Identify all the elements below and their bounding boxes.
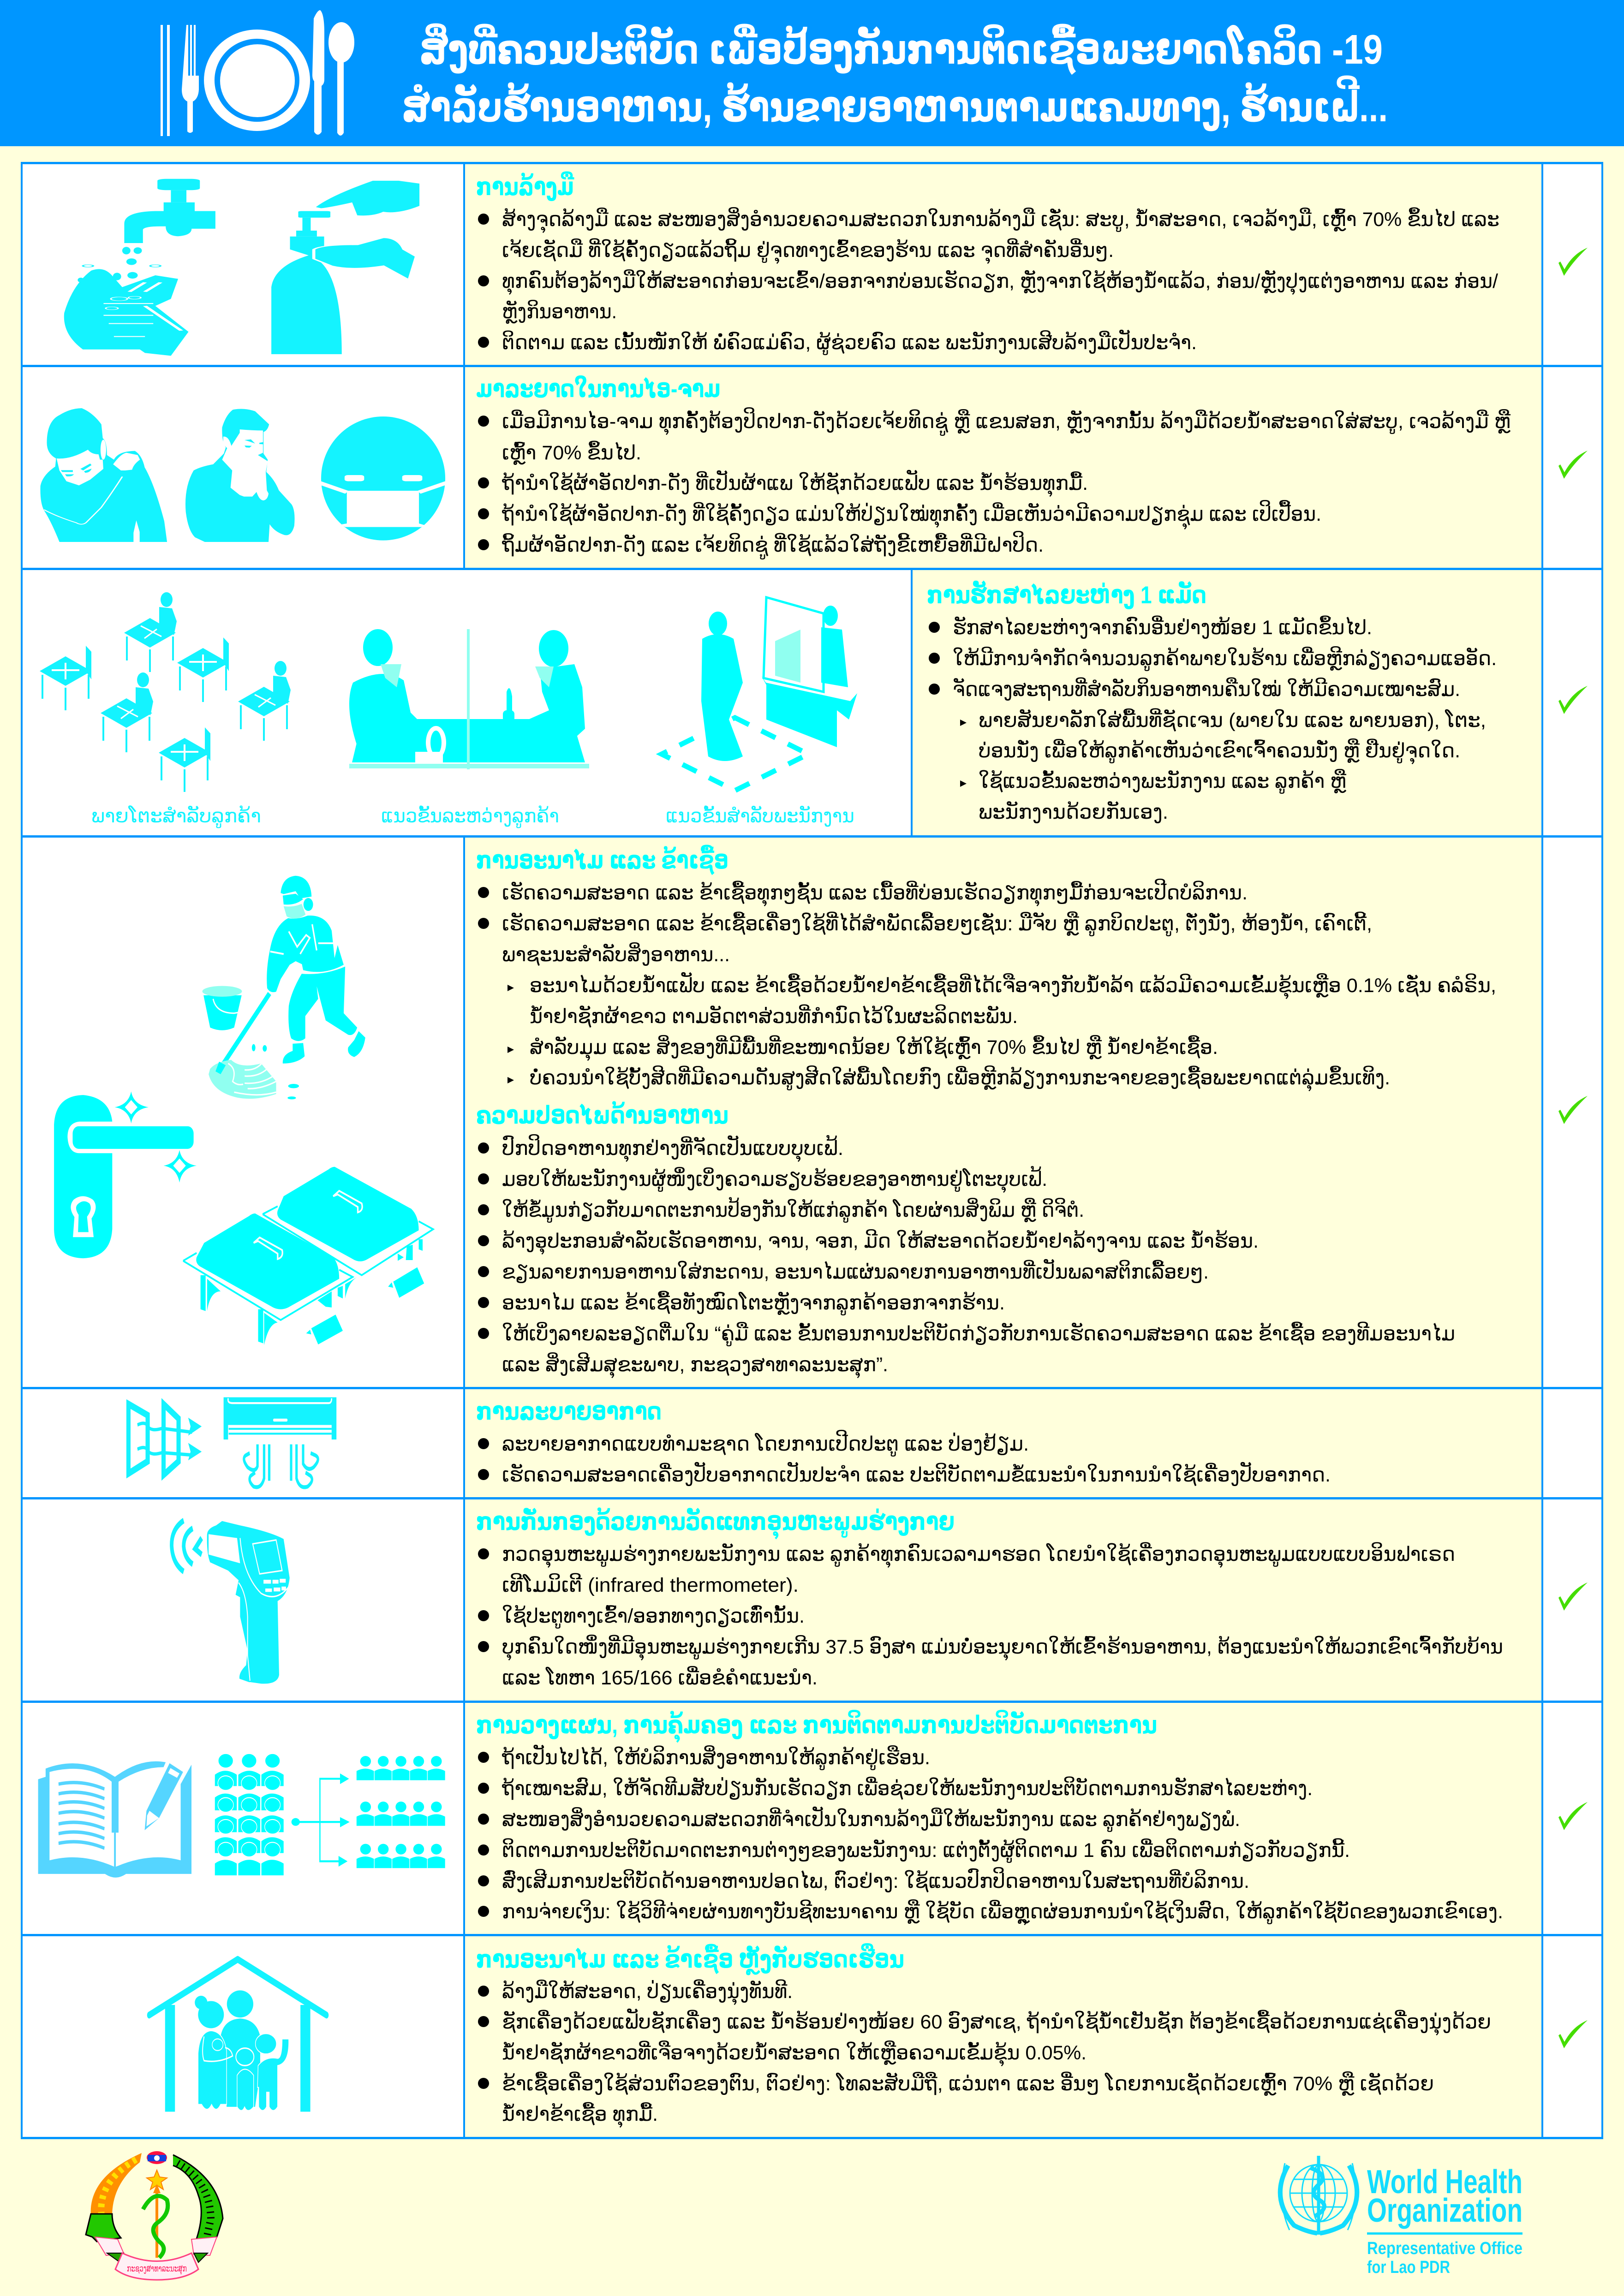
- icon: check, handwashing: [1558, 248, 1588, 276]
- panel text: food safety: ໃຫ້ຂໍ້ມູນກ່ຽວກັບມາດຕະການປ້ອງກັນໃຫ້ແກ່ລູກຄ້າ ໂດຍຜ່ານສິ່ງພິມ ຫຼື ດິຈິຕໍ.: [502, 1197, 1084, 1223]
- panel text: cleaning and disinfection: ພາຊະນະສຳລັບສິ່ງອາຫານ...: [502, 943, 730, 966]
- panel text: temperature screening: ບຸກຄົນໃດໜຶ່ງທີ່ມີອຸນຫະພູມຮ່າງກາຍເກີນ 37.5 ອົງສາ ແມ່ນບໍ່ອະນຸຍາດໃຫ້ເຂົ້າຮ້ານອາຫານ, ຕ້ອງແນະນຳໃຫ້ພວກເຂົາເຈົ້າກັບບ້ານ: [502, 1635, 1503, 1661]
- panel text: cleaning after returning home: ນໍ້າຢາຊັກຜ້າຂາວທີ່ເຈືອຈາງດ້ວຍນໍ້າສະອາດ ໃຫ້ເຫຼືອຄວາມເຂັ້ມຂຸ້ນ 0.05%.: [502, 2041, 1087, 2067]
- header band: [0, 0, 1624, 146]
- panel text: planning and monitoring: ຕິດຕາມການປະຕິບັດມາດຕະການຕ່າງໆຂອງພະນັກງານ: ແຕ່ງຕັ້ງຜູ້ຕິດຕາມ 1 ຄົນ ເພື່ອຕິດຕາມກ່ຽວກັບວຽກນີ້.: [502, 1839, 1350, 1863]
- icon: clean door handle with sparkles: [54, 1091, 197, 1258]
- caption: barrier for staff: ແນວຂັ້ນສຳລັບພະນັກງານ: [666, 805, 854, 827]
- panel text: cleaning after returning home: [476, 1943, 1491, 2128]
- panel text: cough etiquette: ຖ້ານຳໃຊ້ຜ້າອັດປາກ-ດັງ ທີ່ເປັນຜ້າແພ ໃຫ້ຊັກດ້ວຍແຟັບ ແລະ ນໍ້າຮ້ອນທຸກມື້.: [502, 470, 1088, 497]
- icon: check, cleaning: [1558, 1096, 1588, 1124]
- panel: ventilation icons: [128, 1397, 336, 1487]
- icon: face with mask: [319, 416, 447, 541]
- WHO wordmark: Organization: [1367, 2192, 1522, 2229]
- panel text: ventilation: ລະບາຍອາກາດແບບທຳມະຊາດ ໂດຍການເປີດປະຕູ ແລະ ປ່ອງຢ້ຽມ.: [502, 1430, 1029, 1457]
- panel text: cleaning after returning home: ຂ້າເຊື້ອເຄື່ອງໃຊ້ສ່ວນຕົວຂອງຕົນ, ຕົວຢ່າງ: ໂທລະສັບມືຖື, ແວ່ນຕາ ແລະ ອື່ນໆ ໂດຍການເຊັດດ້ວຍເຫຼົ້າ 70% ຫຼື ເຊັດດ້ວຍ: [502, 2072, 1434, 2096]
- panel text: temperature screening: ແລະ ໂທຫາ 165/166 ເພື່ອຂໍຄຳແນະນຳ.: [502, 1666, 818, 1689]
- panel text: temperature screening: [476, 1507, 1503, 1689]
- heading: ventilation: ການລະບາຍອາກາດ: [476, 1398, 662, 1425]
- panel text: physical distancing: ໃຊ້ແນວຂັ້ນລະຫວ່າງພະນັກງານ ແລະ ລູກຄ້າ ຫຼື: [979, 769, 1347, 794]
- icon: chafing dishes: [183, 1167, 433, 1345]
- panel text: physical distancing: ພະນັກງານດ້ວຍກັນເອງ.: [979, 801, 1168, 823]
- panel text: hand washing: [476, 171, 1499, 355]
- logo: Lao Ministry of Health emblem: ກະຊວງສາທາລະນະສຸກ: [127, 2264, 187, 2275]
- panel text: cleaning and disinfection: ເຮັດຄວາມສະອາດ ແລະ ຂ້າເຊື້ອເຄື່ອງໃຊ້ທີ່ໄດ້ສຳພັດເລື້ອຍໆເຊັ່ນ: ມືຈັບ ຫຼື ລູກບິດປະຕູ, ຕັ່ງນັ່ງ, ຫ້ອງນໍ້າ, ເຄົາເຕີ້,: [502, 912, 1372, 936]
- icon: check, planning: [1558, 1802, 1588, 1830]
- panel text: cleaning and disinfection: ບໍ່ຄວນນຳໃຊ້ບັ້ງສີດທີ່ມີຄວາມດັນສູງສີດໃສ່ພື້ນໂດຍກົງ ເພື່ອຫຼີກລ້ຽງການກະຈາຍຂອງເຊື້ອພະຍາດແຕ່ລຸ່ມຂຶ້ນເທິງ.: [530, 1066, 1390, 1092]
- icon: person coughing into elbow: [40, 408, 167, 542]
- heading: cough etiquette: ມາລະຍາດໃນການໄອ-ຈາມ: [476, 375, 721, 403]
- icon: person mopping: [203, 876, 365, 1100]
- icon: check, at home: [1558, 2020, 1588, 2048]
- caption: barrier between customers: ແນວຂັ້ນລະຫວ່າງລູກຄ້າ: [381, 805, 559, 828]
- icon: window with airflow arrows: [128, 1404, 202, 1475]
- panel text: cleaning after returning home: ລ້າງມືໃຫ້ສະອາດ, ປ່ຽນເຄື່ອງນຸ່ງທັນທີ.: [502, 1980, 793, 2005]
- heading: food safety: ຄວາມປອດໄພດ້ານອາຫານ: [476, 1101, 728, 1129]
- icon: three small teams: [357, 1756, 445, 1868]
- icon: fork, plate, knife and spoon: [161, 10, 354, 136]
- panel text: cough etiquette: ຖິ້ມຜ້າອັດປາກ-ດັງ ແລະ ເຈ້ຍທິດຊູ່ ທີ່ໃຊ້ແລ້ວໃສ່ຖັງຂີ້ເຫຍື້ອທີ່ມີຝາປິດ.: [502, 531, 1044, 559]
- panel text: food safety: [476, 1101, 1455, 1379]
- panel text: cleaning after returning home: ຊັກເຄື່ອງດ້ວຍແຟັບຊັກເຄື່ອງ ແລະ ນໍ້າຮ້ອນຢ່າງໜ້ອຍ 60 ອົງສາເຊ, ຖ້ານຳໃຊ້ນໍ້າເຢັນຊັກ ຕ້ອງຂ້າເຊື້ອດ້ວຍການແຊ່ເຄື່ອງນຸ່ງດ້ວຍ: [502, 2009, 1491, 2036]
- panel text: planning and monitoring: ຖ້າເປັນໄປໄດ້, ໃຫ້ບໍລິການສິ່ງອາຫານໃຫ້ລູກຄ້າຢູ່ເຮືອນ.: [502, 1744, 930, 1770]
- icon: open book with pencil: [38, 1761, 191, 1878]
- caption: tables for customers: ພາຍໂຕະສຳລັບລູກຄ້າ: [91, 805, 261, 828]
- icon: air conditioner: [224, 1397, 336, 1487]
- checkmarks: [1558, 248, 1588, 2048]
- icon: washing hands: [64, 269, 189, 356]
- panel text: hand washing: ຫຼັງກິນອາຫານ.: [502, 300, 617, 324]
- heading: cleaning and disinfection: ການອະນາໄມ ແລະ ຂ້າເຊື້ອ: [476, 845, 728, 875]
- panel text: planning and monitoring: ສະໜອງສິ່ງອຳນວຍຄວາມສະດວກທີ່ຈຳເປັນໃນການລ້າງມືໃຫ້ພະນັກງານ ແລະ ລູກຄ້າຢ່າງພຽງພໍ.: [502, 1806, 1240, 1832]
- panel text: physical distancing: ຮັກສາໄລຍະຫ່າງຈາກຄົນອື່ນຢ່າງໜ້ອຍ 1 ແມັດຂຶ້ນໄປ.: [953, 616, 1372, 639]
- WHO wordmark: World Health: [1367, 2164, 1522, 2201]
- panel text: planning and monitoring: ສົ່ງເສີມການປະຕິບັດດ້ານອາຫານປອດໄພ, ຕົວຢ່າງ: ໃຊ້ແນວປົກປິດອາຫານໃນສະຖານທີ່ບໍລິການ.: [502, 1868, 1249, 1892]
- panel text: cleaning and disinfection: ເຮັດຄວາມສະອາດ ແລະ ຂ້າເຊື້ອທຸກໆຊັ້ນ ແລະ ເນື້ອທີ່ບ່ອນເຮັດວຽກທຸກໆມື້ກ່ອນຈະເປີດບໍລິການ.: [502, 879, 1248, 907]
- panel text: cleaning after returning home: ນໍ້າຢາຂ້າເຊື້ອ ທຸກມື້.: [502, 2103, 658, 2128]
- heading: one metre distance: ການຮັກສາໄລຍະຫ່າງ 1 ແມັດ: [927, 580, 1206, 609]
- icon: spaced tables: [40, 592, 291, 792]
- panel: planning icons: [38, 1754, 445, 1878]
- WHO wordmark: for Lao PDR: [1367, 2258, 1450, 2277]
- panel text: physical distancing: ຈັດແຈງສະຖານທີ່ສຳລັບກິນອາຫານຄືນໃໝ່ ໃຫ້ມີຄວາມເໝາະສົມ.: [953, 678, 1460, 701]
- panel: cleaning and food safety icons: [54, 876, 433, 1345]
- WHO wordmark: [1367, 2164, 1522, 2277]
- icon: customers separated by partition: [349, 629, 589, 769]
- panel text: cleaning and disinfection: ອະນາໄມດ້ວຍນໍ້າແຟັບ ແລະ ຂ້າເຊື້ອດ້ວຍນໍ້າຢາຂ້າເຊື້ອທີ່ໄດ້ເຈືອຈາງກັບນໍ້າລ້າ ແລ້ວມີຄວາມເຂັ້ມຂຸ້ນເຫຼືອ 0.1% ເຊັ່ນ ຄລໍຣິນ,: [530, 972, 1496, 999]
- icon: check, distancing: [1558, 686, 1588, 714]
- panel text: cough etiquette: [476, 375, 1511, 559]
- panel text: cough etiquette: ຖ້ານຳໃຊ້ຜ້າອັດປາກ-ດັງ ທີ່ໃຊ້ຄັ້ງດຽວ ແມ່ນໃຫ້ປ່ຽນໃໝ່ທຸກຄັ້ງ ເມື່ອເຫັນວ່າມີຄວາມປຽກຊຸ່ມ ແລະ ເປິເປື້ອນ.: [502, 500, 1321, 530]
- panel text: cleaning and disinfection: ສຳລັບມຸມ ແລະ ສິ່ງຂອງທີ່ມີພື້ນທີ່ຂະໜາດນ້ອຍ ໃຫ້ໃຊ້ເຫຼົ້າ 70% ຂຶ້ນໄປ ຫຼື ນໍ້າຢາຂ້າເຊື້ອ.: [530, 1035, 1218, 1061]
- WHO wordmark: Representative Office: [1367, 2239, 1522, 2258]
- panel: cough and sneeze icons: [40, 408, 447, 542]
- icon: large group of people: [215, 1754, 284, 1876]
- panel text: cleaning and disinfection: ນໍ້າຢາຊັກຜ້າຂາວ ຕາມອັດຕາສ່ວນທີ່ກຳນົດໄວ້ໃນຜະລິດຕະພັນ.: [530, 1005, 1018, 1028]
- icon: soap bottle and hands: [271, 181, 419, 354]
- title: ສຳລັບຮ້ານອາຫານ, ຮ້ານຂາຍອາຫານຕາມແຄມທາງ, ຮ້ານເຝີ...: [402, 75, 1388, 131]
- panel text: planning and monitoring: [476, 1710, 1503, 1926]
- panel text: temperature screening: ເທີໂມມິເຕີ (infrared thermometer).: [502, 1574, 799, 1596]
- title: ສິ່ງທີ່ຄວນປະຕິບັດ ເພື່ອປ້ອງກັນການຕິດເຊື້ອພະຍາດໂຄວິດ -19: [419, 23, 1383, 75]
- panel: family in house icon: [149, 1959, 327, 2112]
- panel text: ventilation: ເຮັດຄວາມສະອາດເຄື່ອງປັບອາກາດເປັນປະຈຳ ແລະ ປະຕິບັດຕາມຂໍ້ແນະນຳໃນການນຳໃຊ້ເຄື່ອງປັບອາກາດ.: [502, 1462, 1331, 1486]
- panel text: food safety: ໃຫ້ເບິ່ງລາຍລະອຽດຕື່ມໃນ “ຄູ່ມື ແລະ ຂັ້ນຕອນການປະຕິບັດກ່ຽວກັບການເຮັດຄວາມສະອາດ ແລະ ຂ້າເຊື້ອ ຂອງທີມອະນາໄມ: [502, 1322, 1455, 1346]
- panel text: cough etiquette: ເຫຼົ້າ 70% ຂຶ້ນໄປ.: [502, 441, 641, 465]
- panel text: physical distancing: ພາຍສັນຍາລັກໃສ່ພື້ນທີ່ຊັດເຈນ (ພາຍໃນ ແລະ ພາຍນອກ), ໂຕະ,: [979, 709, 1486, 732]
- panel text: food safety: ອະນາໄມ ແລະ ຂ້າເຊື້ອທັງໝົດໂຕະຫຼັງຈາກລູກຄ້າອອກຈາກຮ້ານ.: [502, 1291, 1005, 1315]
- panel text: food safety: ປົກປິດອາຫານທຸກຢ່າງທີ່ຈັດເປັນແບບບຸບເຟ້.: [502, 1135, 843, 1162]
- icon: check, screening: [1558, 1582, 1588, 1611]
- panel text: planning and monitoring: ຖ້າເໝາະສົມ, ໃຫ້ຈັດທີມສັບປ່ຽນກັນເຮັດວຽກ ເພື່ອຊ່ວຍໃຫ້ພະນັກງານປະຕິບັດຕາມການຮັກສາໄລຍະຫ່າງ.: [502, 1777, 1313, 1800]
- heading: planning and monitoring: ການວາງແຜນ, ການຄຸ້ມຄອງ ແລະ ການຕິດຕາມການປະຕິບັດມາດຕະການ: [476, 1710, 1157, 1743]
- panel text: temperature screening: ໃຊ້ປະຕູທາງເຂົ້າ/ອອກທາງດຽວເທົ່ານັ້ນ.: [502, 1605, 805, 1629]
- title: [402, 23, 1388, 131]
- panel text: physical distancing: [927, 580, 1497, 823]
- panel text: ventilation: [476, 1398, 1331, 1486]
- logo: Lao Ministry of Health emblem: [86, 2151, 223, 2280]
- panel text: cough etiquette: ເມື່ອມີການໄອ-ຈາມ ທຸກຄັ້ງຕ້ອງປິດປາກ-ດັງດ້ວຍເຈ້ຍທິດຊູ່ ຫຼື ແຂນສອກ, ຫຼັງຈາກນັ້ນ ລ້າງມືດ້ວຍນໍ້າສະອາດໃສ່ສະບູ, ເຈວລ້າງມື ຫຼື: [502, 408, 1511, 436]
- icon: WHO emblem: [1280, 2156, 1357, 2235]
- arrows: splitting into teams: [292, 1773, 350, 1867]
- panel: hand washing icons: [64, 179, 419, 356]
- panel text: food safety: ລ້າງອຸປະກອນສຳລັບເຮັດອາຫານ, ຈານ, ຈອກ, ມີດ ໃຫ້ສະອາດດ້ວຍນໍ້າຢາລ້າງຈານ ແລະ ນໍ້າຮ້ອນ.: [502, 1230, 1259, 1255]
- panel text: hand washing: ທຸກຄົນຕ້ອງລ້າງມືໃຫ້ສະອາດກ່ອນຈະເຂົ້າ/ອອກຈາກບ່ອນເຮັດວຽກ, ຫຼັງຈາກໃຊ້ຫ້ອງນໍ້າແລ້ວ, ກ່ອນ/ຫຼັງປຸງແຕ່ງອາຫານ ແລະ ກ່ອນ/: [502, 270, 1498, 295]
- icon: check, etiquette: [1558, 451, 1588, 479]
- panel text: hand washing: ຕິດຕາມ ແລະ ເນັ້ນໜັກໃຫ້ ພໍ່ຄົວແມ່ຄົວ, ຜູ້ຊ່ວຍຄົວ ແລະ ພະນັກງານເສີບລ້າງມືເປັນປະຈຳ.: [502, 329, 1197, 355]
- panel text: cleaning and disinfection: [476, 845, 1496, 1092]
- panel text: physical distancing: ບ່ອນນັ່ງ ເພື່ອໃຫ້ລູກຄ້າເຫັນວ່າເຂົາເຈົ້າຄວນນັ່ງ ຫຼື ຢືນຢູ່ຈຸດໃດ.: [979, 739, 1460, 765]
- panel text: hand washing: ເຈ້ຍເຊັດມື ທີ່ໃຊ້ຄັ້ງດຽວແລ້ວຖິ້ມ ຢູ່ຈຸດທາງເຂົ້າຂອງຮ້ານ ແລະ ຈຸດທີ່ສຳຄັນອື່ນໆ.: [502, 239, 1114, 264]
- heading: hand washing: ການລ້າງມື: [476, 171, 574, 201]
- panel text: hand washing: ສ້າງຈຸດລ້າງມື ແລະ ສະໜອງສິ່ງອຳນວຍຄວາມສະດວກໃນການລ້າງມື ເຊັ່ນ: ສະບູ, ນໍ້າສະອາດ, ເຈວລ້າງມື, ເຫຼົ້າ 70% ຂຶ້ນໄປ ແລະ: [502, 208, 1499, 233]
- heading: temperature screening: ການກັ່ນກອງດ້ວຍການວັດແທກອຸນຫະພູມຮ່າງກາຍ: [476, 1507, 955, 1540]
- panel text: physical distancing: ໃຫ້ມີການຈຳກັດຈຳນວນລູກຄ້າພາຍໃນຮ້ານ ເພື່ອຫຼີກລ່ຽງຄວາມແອອັດ.: [953, 647, 1497, 671]
- logo: World Health Organization: [1280, 2156, 1522, 2277]
- icon: water tap: [78, 179, 215, 282]
- panel: infrared thermometer icon: [172, 1521, 290, 1684]
- panel text: temperature screening: ກວດອຸນຫະພູມຮ່າງກາຍພະນັກງານ ແລະ ລູກຄ້າທຸກຄົນເວລາມາຮອດ ໂດຍນຳໃຊ້ເຄື່ອງກວດອຸນຫະພູມແບບແບບອິນຟາເຣດ: [502, 1543, 1455, 1568]
- icon: person sneezing into tissue: [185, 409, 295, 542]
- panel text: planning and monitoring: ການຈ່າຍເງິນ: ໃຊ້ວິທີຈ່າຍຜ່ານທາງບັນຊີທະນາຄານ ຫຼື ໃຊ້ບັດ ເພື່ອຫຼຸດຜ່ອນການນຳໃຊ້ເງິນສົດ, ໃຫ້ລູກຄ້າໃຊ້ບັດຂອງພວກເຂົາເອງ.: [502, 1900, 1503, 1926]
- heading: cleaning after returning home: ການອະນາໄມ ແລະ ຂ້າເຊື້ອ ຫຼັງກັບຮອດເຮືອນ: [476, 1943, 904, 1975]
- panel: physical distancing icons: [40, 592, 857, 828]
- icon: queueing person on floor marker with counter: [662, 597, 857, 791]
- panel text: food safety: ຂຽນລາຍການອາຫານໃສ່ກະດານ, ອະນາໄມແຜ່ນລາຍການອາຫານທີ່ເປັນພລາສຕິກເລື້ອຍໆ.: [502, 1259, 1209, 1283]
- panel text: food safety: ແລະ ສິ່ງເສີມສຸຂະພາບ, ກະຊວງສາທາລະນະສຸກ”.: [502, 1353, 888, 1379]
- panel text: food safety: ມອບໃຫ້ພະນັກງານຜູ້ໜຶ່ງເບິ່ງຄວາມຮຽບຮ້ອຍຂອງອາຫານຢູ່ໂຕະບຸບເຟ້.: [502, 1166, 1047, 1193]
